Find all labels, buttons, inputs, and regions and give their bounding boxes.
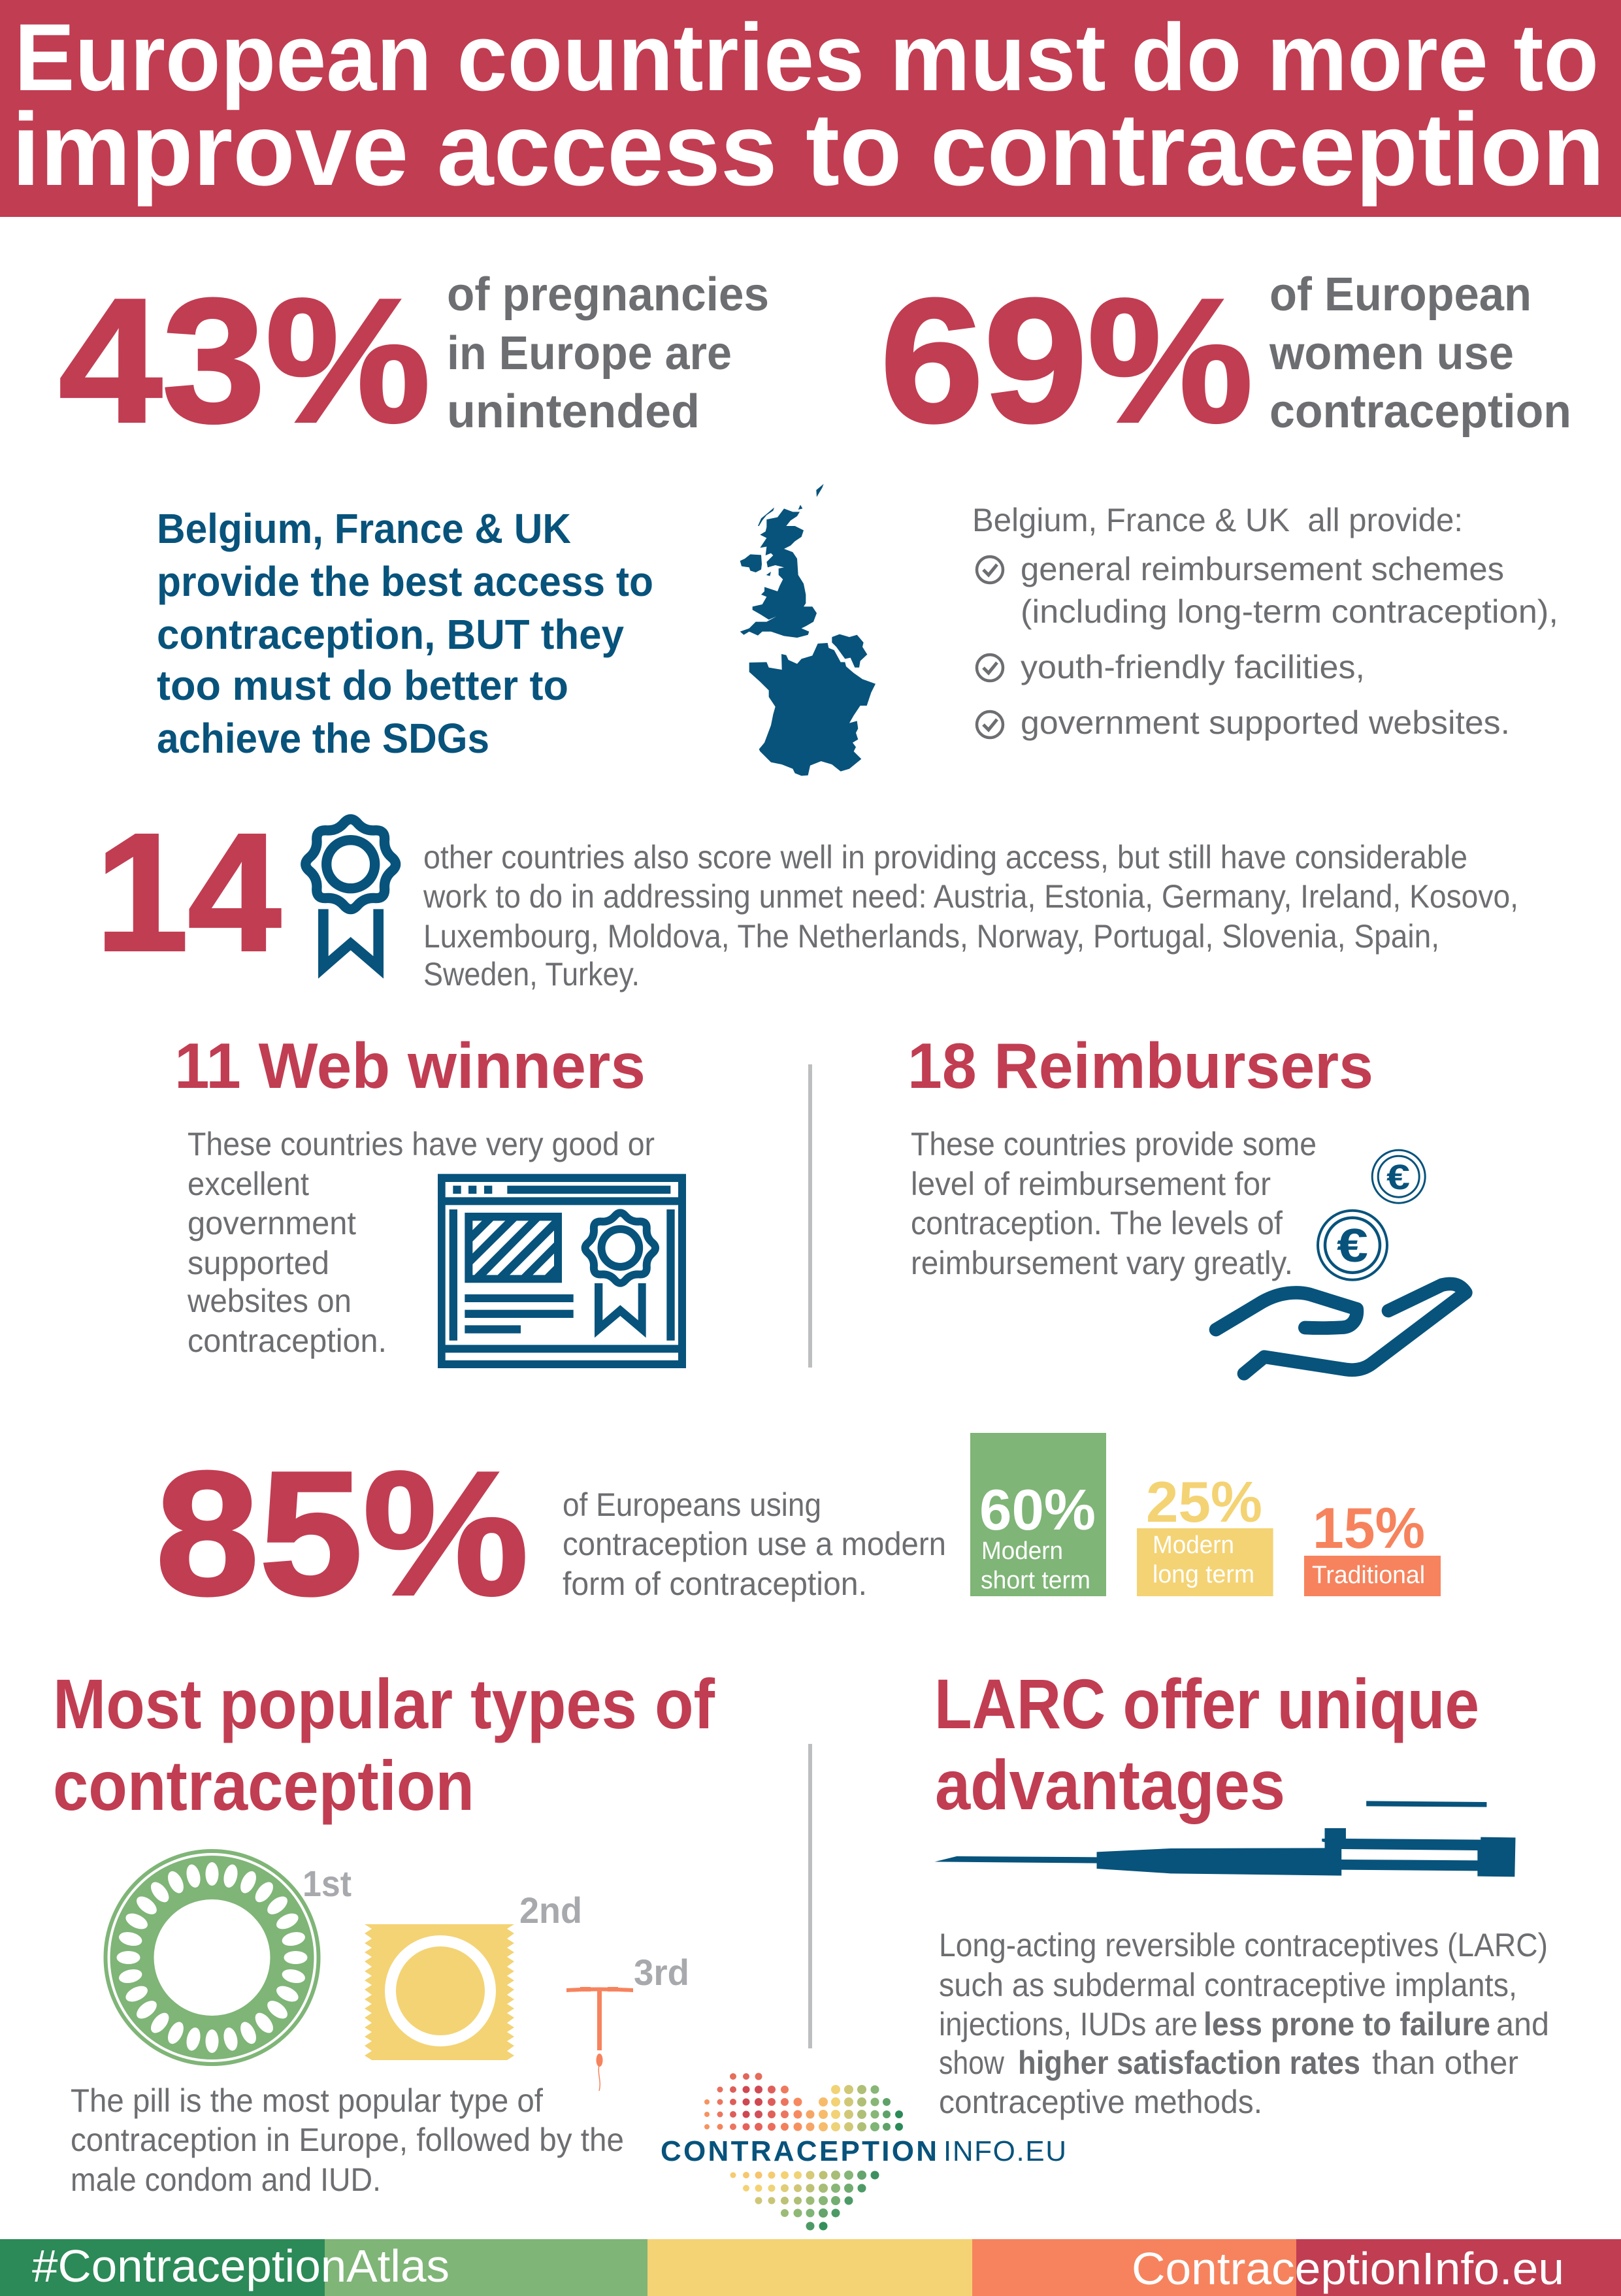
stat: 85% use a modern form <box>156 1435 946 1632</box>
checklist: what Belgium, France and UK provide <box>972 502 1558 741</box>
panel: most popular types <box>53 1664 715 2198</box>
text block: Belgium, France and UK best access: too must do better to <box>157 662 568 709</box>
wordmark: INFO.EU <box>943 2135 1066 2167</box>
title <box>12 4 1605 207</box>
text block: Belgium, France and UK best access: Belgium, France & UK <box>157 505 571 552</box>
label: 3rd: 3rd <box>634 1952 689 1993</box>
text block: contraceptive methods. <box>939 2084 1262 2120</box>
heading <box>934 1664 1479 1824</box>
stat: 14 other countries: Luxembourg, Moldova, The Netherlands, Norway, Portugal, Slovenia, Spain, <box>423 918 1439 955</box>
text block: less prone to failure <box>1203 2006 1490 2042</box>
text block: Belgium, France and UK best access: achieve the SDGs <box>157 715 489 762</box>
stat: 14 other countries <box>95 799 1518 992</box>
panel: web winners <box>174 1030 686 1368</box>
heading: advantages <box>935 1745 1285 1824</box>
icon: website with award <box>438 1174 686 1368</box>
bar: 25% modern long term <box>1137 1469 1273 1596</box>
stat: 69% of women use contraception <box>880 263 1571 459</box>
stat: 43% of pregnancies unintended: 43% <box>59 263 431 459</box>
icon: check mark <box>977 557 1003 583</box>
icon: map of UK, France and Belgium <box>740 484 876 776</box>
icon: hand with euro coins <box>1216 1150 1465 1373</box>
panel: reimbursers <box>908 1030 1465 1373</box>
text block: Long-acting reversible contraceptives (LARC) <box>939 1927 1548 1963</box>
text block <box>911 1126 1317 1281</box>
label: 1st: 1st <box>303 1863 352 1904</box>
text block: websites on <box>187 1283 352 1319</box>
icon: dotted heart <box>704 2073 903 2231</box>
checklist: what Belgium, France and UK provide: (including long-term contraception), <box>1021 593 1558 630</box>
stat: 14 other countries: Sweden, Turkey. <box>423 956 640 992</box>
stat: 14 other countries: other countries also score well in providing access, but still have considerable <box>423 839 1467 876</box>
icon: pill pack <box>106 1851 319 2064</box>
checklist: what Belgium, France and UK provide: youth-friendly facilities, <box>1021 649 1365 685</box>
wordmark <box>661 2135 1066 2167</box>
bar: 60% modern short term: short term <box>981 1567 1090 1594</box>
stat: 43% of pregnancies unintended: in Europe are <box>447 327 732 380</box>
text block: government <box>188 1205 356 1241</box>
text block: These countries provide some <box>911 1126 1317 1162</box>
heading: 11 Web winners <box>174 1030 646 1102</box>
hashtag: #ContraceptionAtlas <box>32 2240 450 2291</box>
text block <box>71 2082 624 2198</box>
stat: 69% of women use contraception: contraception <box>1269 385 1571 438</box>
stat: 14 other countries: 14 <box>95 799 281 986</box>
text block: Belgium, France and UK best access <box>157 505 653 762</box>
stat: 85% use a modern form: form of contraception. <box>563 1566 867 1602</box>
title: improve access to contraception <box>12 92 1605 207</box>
text block: excellent <box>188 1166 309 1202</box>
text block: than other <box>1372 2044 1518 2081</box>
stat: 43% of pregnancies unintended <box>59 263 769 459</box>
chart: contraception type shares <box>970 1433 1441 1596</box>
stat: 43% of pregnancies unintended: of pregnancies <box>447 269 769 321</box>
text block: and <box>1496 2006 1549 2042</box>
icon: check mark <box>977 655 1003 681</box>
stat: 69% of women use contraception: 69% <box>880 263 1253 459</box>
icon: award rosette <box>306 819 396 979</box>
checklist: what Belgium, France and UK provide: government supported websites. <box>1021 704 1510 741</box>
text block: The pill is the most popular type of <box>71 2082 543 2119</box>
wordmark: CONTRACEPTION <box>661 2135 937 2167</box>
text block: injections, IUDs are <box>939 2006 1198 2042</box>
footer bar <box>0 2239 1621 2296</box>
stat: 85% use a modern form: contraception use a modern <box>563 1526 946 1562</box>
icon: check mark <box>977 712 1003 738</box>
stat: 85% use a modern form: 85% <box>156 1435 529 1632</box>
text block <box>939 1927 1549 2120</box>
text block: contraception. The levels of <box>911 1205 1283 1241</box>
bar: 25% modern long term: Modern <box>1153 1532 1234 1559</box>
bar: 60% modern short term: 60% <box>979 1477 1096 1542</box>
stat: 69% of women use contraception: women use <box>1269 327 1514 380</box>
text block: supported <box>188 1245 329 1281</box>
website: ContraceptionInfo.eu <box>1132 2243 1564 2294</box>
icon: implant applicator <box>935 1801 1516 1877</box>
text block <box>187 1126 655 1359</box>
panel: LARC advantages <box>934 1664 1549 2120</box>
icon: hand with euro coins: € <box>1337 1220 1368 1272</box>
bar: 25% modern long term: 25% <box>1146 1469 1262 1534</box>
stat: 43% of pregnancies unintended: unintended <box>447 385 700 438</box>
heading: contraception <box>53 1746 474 1825</box>
heading: 18 Reimbursers <box>908 1030 1373 1102</box>
heading: LARC offer unique <box>934 1664 1479 1743</box>
icon: hand with euro coins: € <box>1386 1158 1410 1197</box>
bar: 60% modern short term <box>970 1433 1106 1596</box>
bar: 25% modern long term: long term <box>1153 1561 1254 1588</box>
stat: 85% use a modern form: of Europeans using <box>563 1486 821 1523</box>
text block: Belgium, France and UK best access: contraception, BUT they <box>157 611 624 658</box>
label: 2nd: 2nd <box>519 1890 582 1931</box>
checklist: what Belgium, France and UK provide: general reimbursement schemes <box>1021 551 1504 587</box>
bar: 15% traditional <box>1304 1496 1441 1596</box>
text block: level of reimbursement for <box>911 1166 1271 1202</box>
text block: Belgium, France and UK best access: provide the best access to <box>157 558 653 605</box>
stat: 69% of women use contraception: of European <box>1269 269 1531 321</box>
text block: contraception in Europe, followed by the <box>71 2122 624 2158</box>
checklist: what Belgium, France and UK provide: Belgium, France & UK all provide: <box>972 502 1463 538</box>
text block: reimbursement vary greatly. <box>911 1245 1293 1281</box>
icon: IUD <box>566 1987 633 2091</box>
text block: contraception. <box>188 1322 387 1359</box>
text block: These countries have very good or <box>188 1126 655 1162</box>
bar: 15% traditional: 15% <box>1313 1496 1425 1560</box>
bar: 15% traditional: Traditional <box>1312 1562 1425 1589</box>
heading <box>53 1664 715 1825</box>
title banner <box>0 0 1621 217</box>
heading: Most popular types of <box>53 1664 715 1743</box>
text block: such as subdermal contraceptive implants, <box>939 1967 1517 2003</box>
bar: 60% modern short term: Modern <box>981 1537 1063 1565</box>
text block: higher satisfaction rates <box>1018 2044 1360 2081</box>
text block: male condom and IUD. <box>71 2161 381 2198</box>
text block: show <box>939 2044 1005 2081</box>
icon: condom packet <box>365 1924 514 2060</box>
stat: 14 other countries: work to do in addressing unmet need: Austria, Estonia, Germany, Ireland, Kosovo, <box>423 878 1518 915</box>
logo: ContraceptionInfo.eu <box>661 2073 1066 2231</box>
